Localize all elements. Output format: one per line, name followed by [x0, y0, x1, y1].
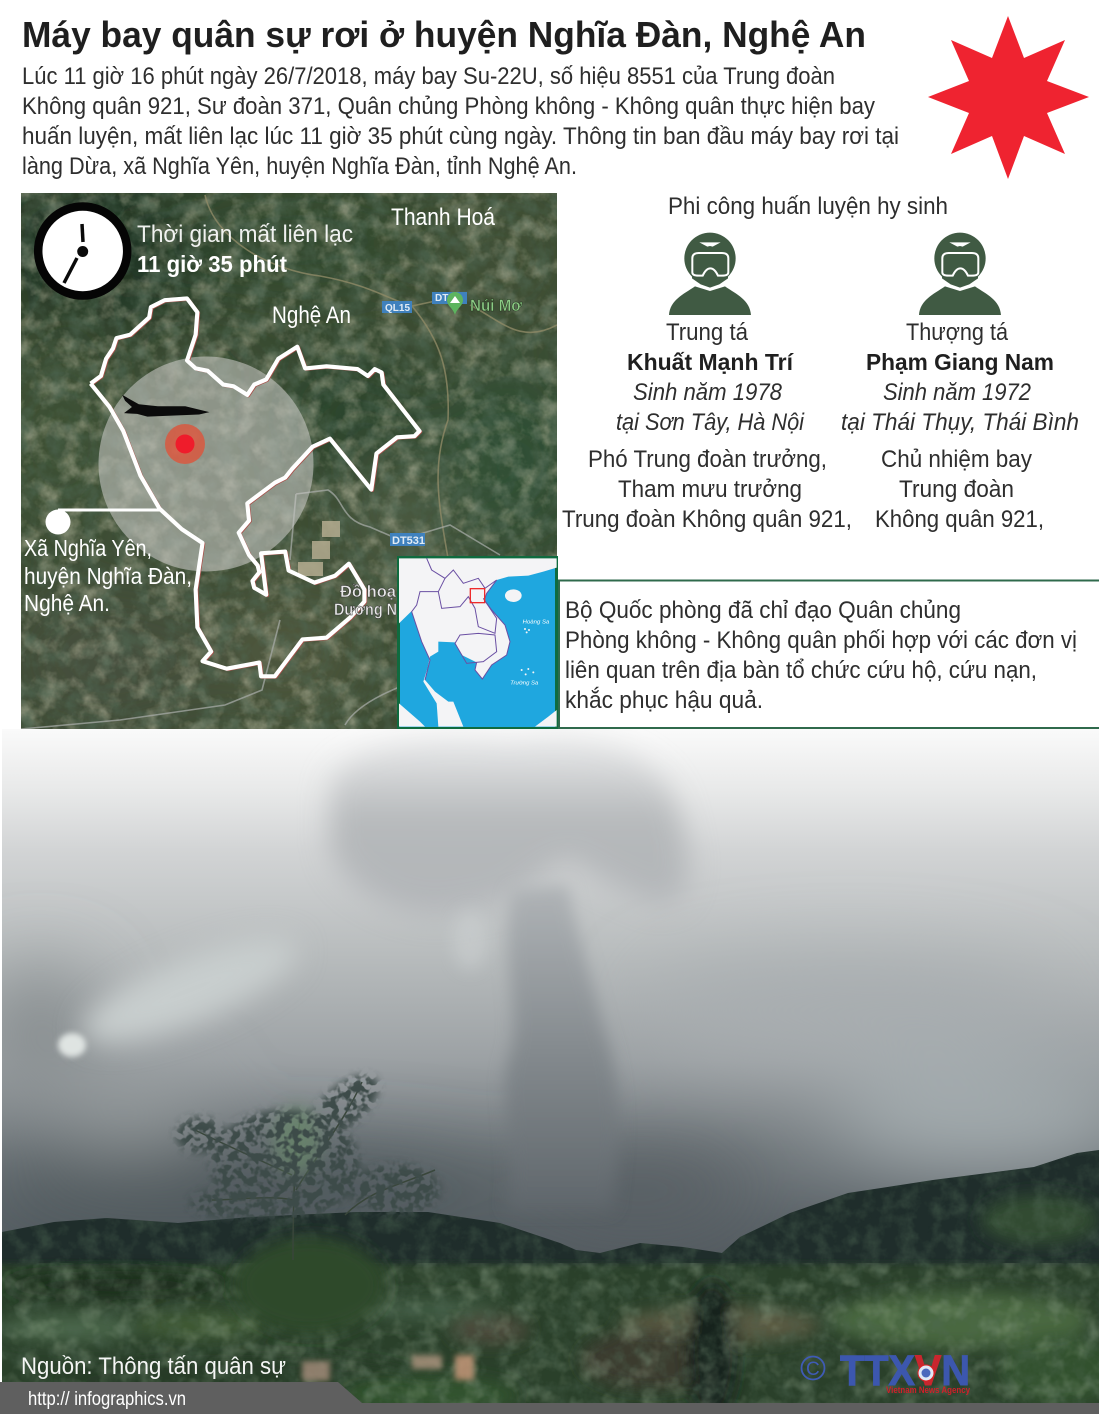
road labels: QL15 [385, 303, 410, 314]
lost contact label [137, 221, 353, 277]
pilot 1 details: Khuất Mạnh Trí [627, 349, 795, 375]
title: Máy bay quân sự rơi ở huyện Nghĩa Đàn, Nghệ An [22, 14, 866, 55]
lost contact label: Thời gian mất liên lạc [137, 221, 353, 248]
callout: rescue directive [559, 580, 1099, 728]
intro text [22, 63, 899, 180]
logo: TTXVN: TTXVN [840, 1347, 970, 1395]
callout: rescue directive: Phòng không - Không quân phối hợp với các đơn vị [565, 627, 1077, 654]
intro text: huấn luyện, mất liên lạc lúc 11 giờ 35 phút cùng ngày. Thông tin ban đầu máy bay rơi tại [22, 123, 899, 150]
pilot 2 details: Chủ nhiệm bay [881, 446, 1032, 473]
graphic credit on map [334, 582, 397, 619]
callout: rescue directive: khắc phục hậu quả. [565, 687, 763, 714]
intro text: làng Dừa, xã Nghĩa Yên, huyện Nghĩa Đàn, tỉnh Nghệ An. [22, 153, 577, 180]
location label: Xã Nghĩa Yên, [24, 535, 152, 561]
industrial blocks [298, 521, 340, 576]
pilot 2 details: Trung đoàn [899, 476, 1014, 503]
pilot 2 details: Phạm Giang Nam [866, 349, 1054, 375]
pilot 2 details: Không quân 921, [875, 506, 1044, 533]
label: Thanh Hoá: Thanh Hoá [391, 204, 496, 231]
location pointer [46, 510, 160, 534]
footer bar [0, 1382, 1099, 1414]
icon: mountain pin [447, 292, 463, 315]
panel: locator inset map [398, 558, 557, 728]
pilot 2 details [841, 319, 1079, 533]
icon: pilot 1 [669, 233, 751, 315]
smoke column [505, 885, 619, 1210]
pilot 1 details: tại Sơn Tây, Hà Nội [616, 409, 805, 436]
logo: TTXVN: C [806, 1359, 820, 1380]
panel: satellite map [0, 180, 580, 730]
footer bar: http:// infographics.vn [28, 1389, 186, 1410]
road labels [382, 292, 467, 547]
pilot 1 details: Sinh năm 1978 [633, 379, 783, 406]
logo: TTXVN: Vietnam News Agency [886, 1385, 970, 1395]
location label [24, 535, 192, 616]
roads [205, 195, 557, 570]
tree [176, 1064, 440, 1333]
panel: locator inset map: Trường Sa [510, 680, 538, 686]
blast radius circle [98, 356, 314, 572]
field [0, 1150, 1099, 1414]
roofs [302, 1355, 474, 1381]
district boundary [91, 298, 421, 677]
graphic credit on map: Dương N [334, 600, 397, 619]
icon: clock [38, 206, 127, 296]
pilot 2 details: Sinh năm 1972 [883, 379, 1031, 406]
pilot 1 details: Trung đoàn Không quân 921, [562, 506, 852, 533]
pilot 2 details: Thượng tá [906, 319, 1009, 346]
hills [2, 1150, 1099, 1267]
pilot 2 details: tại Thái Thụy, Thái Bình [841, 409, 1079, 436]
intro text: Lúc 11 giờ 16 phút ngày 26/7/2018, máy bay Su-22U, số hiệu 8551 của Trung đoàn [22, 63, 835, 90]
icon: aircraft silhouette [122, 395, 209, 417]
pilot 1 details [562, 319, 852, 533]
intro text: Không quân 921, Sư đoàn 371, Quân chủng Phòng không - Không quân thực hiện bay [22, 93, 875, 120]
road labels: DT [435, 293, 448, 304]
label: Nghệ An: Nghệ An [272, 302, 351, 329]
panel: locator inset map: Hoàng Sa [523, 620, 549, 626]
pilot 1 details: Trung tá [666, 319, 749, 346]
road labels: DT531 [392, 535, 425, 547]
label: Núi Mơ: Núi Mơ [470, 296, 523, 315]
graphic credit on map: Đồ hoạ [340, 582, 397, 601]
icon: pilot 2 [919, 233, 1001, 315]
source credit: Nguồn: Thông tấn quân sự [21, 1353, 286, 1380]
icon: red explosion star [928, 16, 1089, 179]
lost contact label: 11 giờ 35 phút [137, 251, 287, 277]
callout: rescue directive: Bộ Quốc phòng đã chỉ đạo Quân chủng [565, 597, 961, 624]
crash location marker [165, 424, 205, 464]
location label: Nghệ An. [24, 590, 110, 616]
pilot 1 details: Tham mưu trưởng [618, 476, 802, 503]
location label: huyện Nghĩa Đàn, [24, 563, 192, 589]
pilot 1 details: Phó Trung đoàn trưởng, [588, 446, 827, 473]
heading: pilots: Phi công huấn luyện hy sinh [668, 193, 948, 220]
callout: rescue directive: liên quan trên địa bàn tổ chức cứu hộ, cứu nạn, [565, 657, 1037, 684]
photo: smoke plume over hills [0, 729, 1099, 1414]
